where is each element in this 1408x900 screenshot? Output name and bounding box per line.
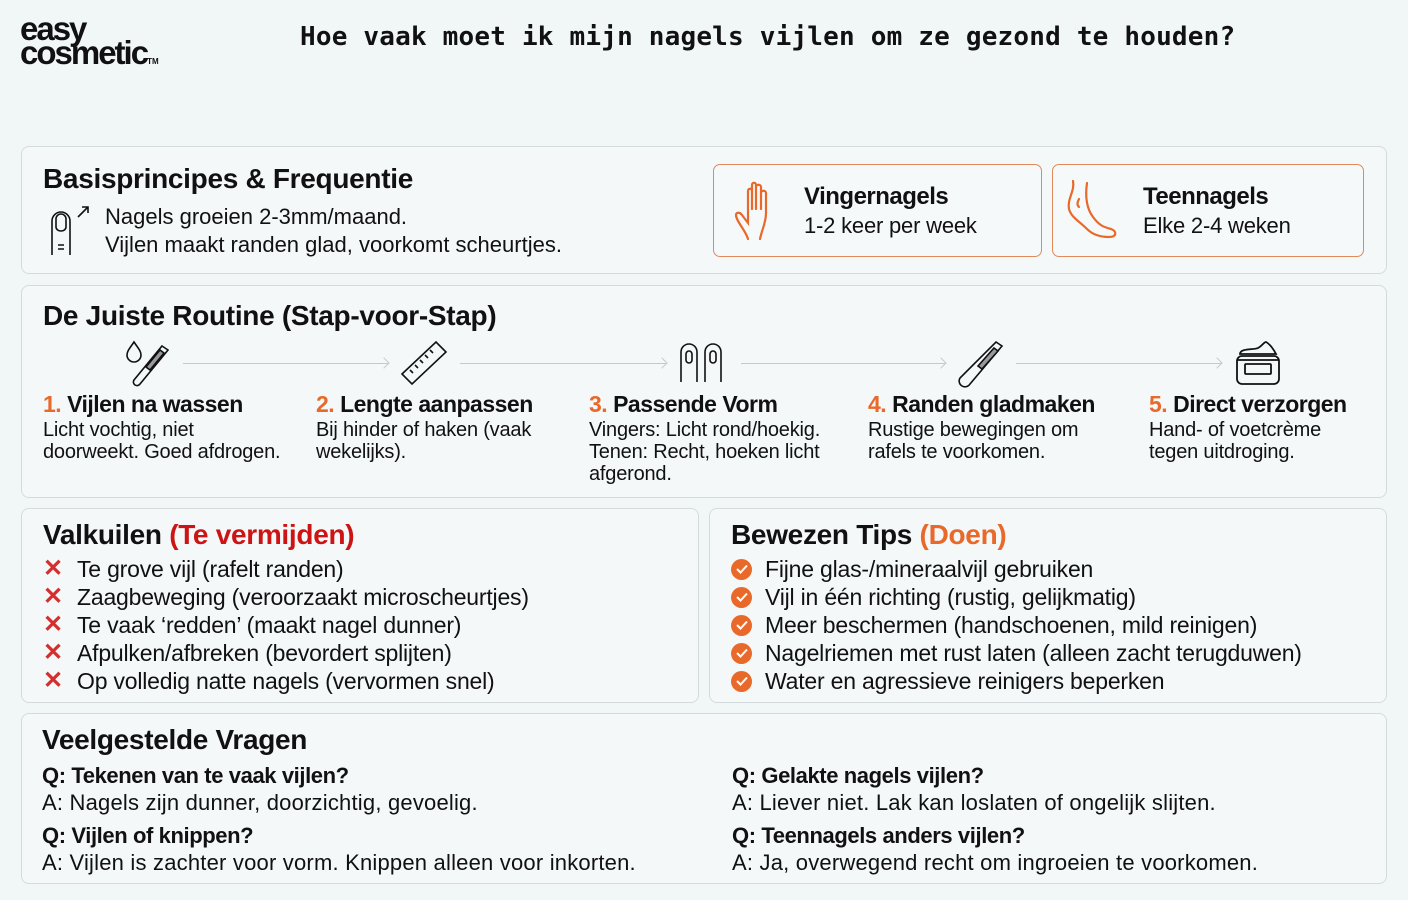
icon: cream jar: [1236, 341, 1280, 385]
panel: valkuilen: [21, 508, 699, 703]
list: valkuilen: ✕: [43, 611, 63, 638]
list: valkuilen: Te vaak ‘redden’ (maakt nagel dunner): [77, 612, 461, 638]
panel: tips: [709, 508, 1387, 703]
heading: tips: Bewezen Tips (Doen): [731, 519, 1006, 550]
icon: ruler: [400, 340, 448, 386]
heading: routine: De Juiste Routine (Stap-voor-Stap): [43, 300, 496, 331]
heading: faq: Veelgestelde Vragen: [42, 724, 307, 755]
step 5: 5. Direct verzorgen: [1149, 391, 1347, 417]
text: basics: [105, 204, 562, 257]
heading: valkuilen: Valkuilen (Te vermijden): [43, 519, 354, 550]
step 2: 2. Lengte aanpassen: [316, 391, 533, 417]
panel: basisprincipes: [21, 146, 1387, 274]
step 4: 4. Randen gladmaken: [868, 391, 1095, 417]
list: tips: [731, 556, 1302, 694]
arrow: [460, 363, 666, 364]
card: vingernagels: 1-2 keer per week: [804, 213, 977, 238]
step 3: Tenen: Recht, hoeken licht: [589, 441, 820, 463]
icon: drop and file: [126, 340, 170, 386]
list: tips: Meer beschermen (handschoenen, mild reinigen): [765, 612, 1257, 638]
card: teennagels: [1052, 164, 1364, 257]
list: valkuilen: [43, 555, 529, 694]
list: valkuilen: Afpulken/afbreken (bevordert splijten): [77, 640, 452, 666]
icon: fingers: [680, 343, 722, 382]
step 3: Vingers: Licht rond/hoekig.: [589, 419, 820, 441]
arrow: [741, 363, 945, 364]
step 1: [43, 391, 280, 463]
list: valkuilen: ✕: [43, 667, 63, 694]
step 3: [589, 391, 820, 485]
faq left column: [42, 763, 636, 875]
faq left column: A: Nagels zijn dunner, doorzichtig, gevoelig.: [42, 790, 478, 815]
step 1: doorweekt. Goed afdrogen.: [43, 441, 280, 463]
step 2: [316, 391, 533, 463]
icon: nail growth: [51, 206, 89, 255]
step 3: 3. Passende Vorm: [589, 391, 777, 417]
step 1: 1. Vijlen na wassen: [43, 391, 243, 417]
list: valkuilen: ✕: [43, 583, 63, 610]
faq right column: A: Liever niet. Lak kan loslaten of ongelijk slijten.: [732, 790, 1216, 815]
card: teennagels: Elke 2-4 weken: [1143, 213, 1291, 238]
logo: cosmeticTM: [20, 34, 159, 71]
step 2: wekelijks).: [316, 441, 406, 463]
list: valkuilen: Zaagbeweging (veroorzaakt microscheurtjes): [77, 584, 529, 610]
list: tips: Vijl in één richting (rustig, gelijkmatig): [765, 584, 1136, 610]
arrow: [183, 363, 388, 364]
text: basics: Vijlen maakt randen glad, voorkomt scheurtjes.: [105, 232, 562, 257]
logo: easy: [20, 10, 85, 47]
list: valkuilen: Op volledig natte nagels (vervormen snel): [77, 668, 495, 694]
icon: foot: [1068, 180, 1116, 238]
step 5: [1149, 391, 1347, 463]
list: tips: Water en agressieve reinigers beperken: [765, 668, 1164, 694]
panel: faq: [21, 713, 1387, 884]
faq left column: A: Vijlen is zachter voor vorm. Knippen alleen voor inkorten.: [42, 850, 636, 875]
faq left column: Q: Vijlen of knippen?: [42, 823, 253, 848]
card: vingernagels: Vingernagels: [804, 183, 948, 210]
card: vingernagels: [713, 164, 1042, 257]
step 1: Licht vochtig, niet: [43, 419, 194, 441]
step 5: Hand- of voetcrème: [1149, 419, 1321, 441]
card: teennagels: Teennagels: [1143, 183, 1268, 210]
step 3: afgerond.: [589, 463, 672, 485]
title: Hoe vaak moet ik mijn nagels vijlen om ze gezond te houden?: [300, 22, 1235, 52]
step 5: tegen uitdroging.: [1149, 441, 1295, 463]
logo: [20, 10, 159, 71]
list: valkuilen: ✕: [43, 639, 63, 666]
text: basics: Nagels groeien 2-3mm/maand.: [105, 204, 407, 229]
step 4: [868, 391, 1095, 463]
panel: routine: [21, 285, 1387, 498]
icon: nail file: [958, 341, 1004, 388]
step 4: rafels te voorkomen.: [868, 441, 1045, 463]
step 4: Rustige bewegingen om: [868, 419, 1078, 441]
list: tips: Fijne glas-/mineraalvijl gebruiken: [765, 556, 1093, 582]
faq right column: Q: Gelakte nagels vijlen?: [732, 763, 984, 788]
list: tips: Nagelriemen met rust laten (alleen zacht terugduwen): [765, 640, 1302, 666]
list: valkuilen: ✕: [43, 555, 63, 582]
faq right column: A: Ja, overwegend recht om ingroeien te voorkomen.: [732, 850, 1258, 875]
heading: basisprincipes: Basisprincipes & Frequentie: [43, 163, 413, 194]
arrow: [1016, 363, 1221, 364]
faq right column: Q: Teennagels anders vijlen?: [732, 823, 1025, 848]
faq left column: Q: Tekenen van te vaak vijlen?: [42, 763, 349, 788]
faq right column: [732, 763, 1258, 875]
icon: hand: [734, 182, 768, 240]
step 2: Bij hinder of haken (vaak: [316, 419, 531, 441]
list: valkuilen: Te grove vijl (rafelt randen): [77, 556, 343, 582]
